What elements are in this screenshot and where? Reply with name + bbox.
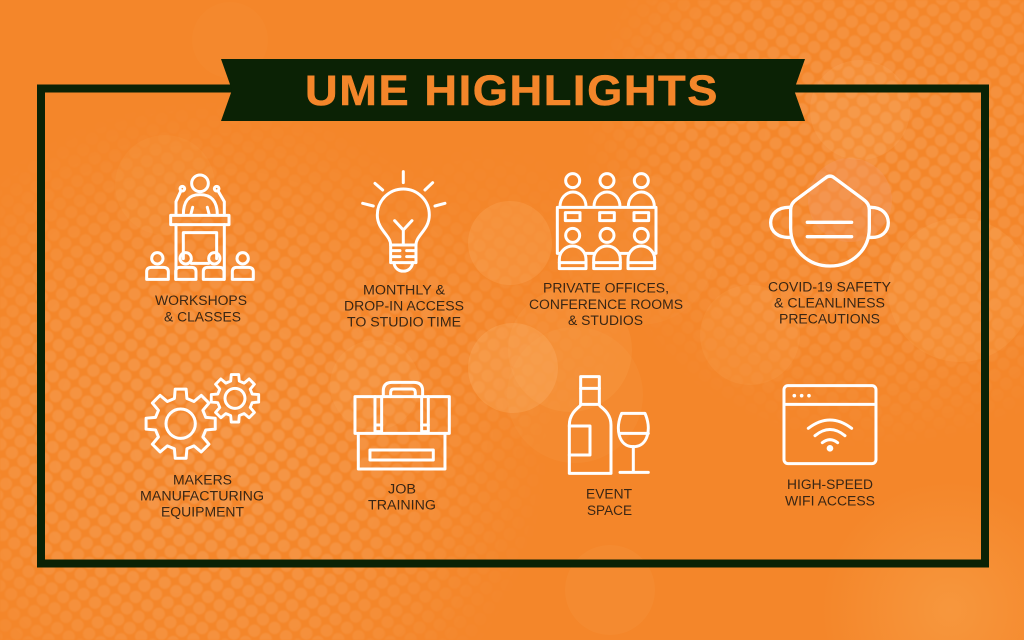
title: UME HIGHLIGHTS bbox=[305, 67, 719, 115]
label: monthly and drop-in access bbox=[344, 282, 464, 330]
item: covid safety bbox=[768, 176, 891, 326]
label: high-speed wifi access: WIFI ACCESS bbox=[785, 494, 875, 509]
item: workshops and classes bbox=[147, 175, 253, 324]
icon: browser window with wifi bbox=[784, 386, 876, 464]
label: private offices: PRIVATE OFFICES, bbox=[543, 281, 669, 296]
label: makers manufacturing equipment: MAKERS bbox=[173, 472, 232, 487]
label: private offices: & STUDIOS bbox=[568, 313, 643, 328]
label: monthly and drop-in access: TO STUDIO TIME bbox=[347, 315, 461, 330]
label: covid safety: PRECAUTIONS bbox=[779, 311, 880, 326]
label: covid safety: COVID-19 SAFETY bbox=[768, 279, 891, 294]
label: monthly and drop-in access: MONTHLY & bbox=[363, 282, 445, 297]
label: high-speed wifi access bbox=[785, 477, 875, 509]
item: event space bbox=[569, 377, 648, 518]
icon: gears bbox=[146, 375, 259, 458]
label: workshops and classes: WORKSHOPS bbox=[155, 293, 247, 308]
label: private offices: CONFERENCE ROOMS bbox=[529, 297, 683, 312]
item: manufacturing equipment bbox=[140, 375, 264, 520]
label: high-speed wifi access: HIGH-SPEED bbox=[787, 477, 873, 492]
icon: podium and audience bbox=[147, 175, 253, 279]
icon: wine bottle and glass bbox=[569, 377, 648, 473]
label: makers manufacturing equipment: EQUIPMENT bbox=[161, 505, 244, 520]
label: private offices bbox=[529, 281, 683, 328]
label: makers manufacturing equipment bbox=[140, 472, 264, 520]
label: event space: EVENT bbox=[586, 486, 632, 501]
label: job training bbox=[368, 481, 436, 513]
label: event space bbox=[586, 486, 632, 518]
item: studio time bbox=[344, 172, 464, 330]
label: workshops and classes: & CLASSES bbox=[164, 310, 241, 324]
label: workshops and classes bbox=[155, 293, 247, 324]
label: covid safety bbox=[768, 279, 891, 326]
item: private offices bbox=[529, 174, 683, 328]
label: job training: TRAINING bbox=[368, 498, 436, 513]
label: covid safety: & CLEANLINESS bbox=[774, 296, 885, 311]
item: job training bbox=[355, 382, 449, 513]
icon: face mask bbox=[771, 176, 888, 266]
label: makers manufacturing equipment: MANUFACTURING bbox=[140, 488, 264, 503]
item: wifi access bbox=[784, 386, 876, 509]
label: job training: JOB bbox=[388, 481, 416, 496]
title banner bbox=[221, 59, 805, 121]
label: event space: SPACE bbox=[587, 503, 632, 518]
icon: conference table bbox=[557, 174, 656, 269]
icon: briefcase bbox=[355, 382, 449, 469]
icon: light bulb bbox=[363, 172, 445, 271]
frame bbox=[41, 88, 985, 564]
label: monthly and drop-in access: DROP-IN ACCESS bbox=[344, 299, 464, 314]
